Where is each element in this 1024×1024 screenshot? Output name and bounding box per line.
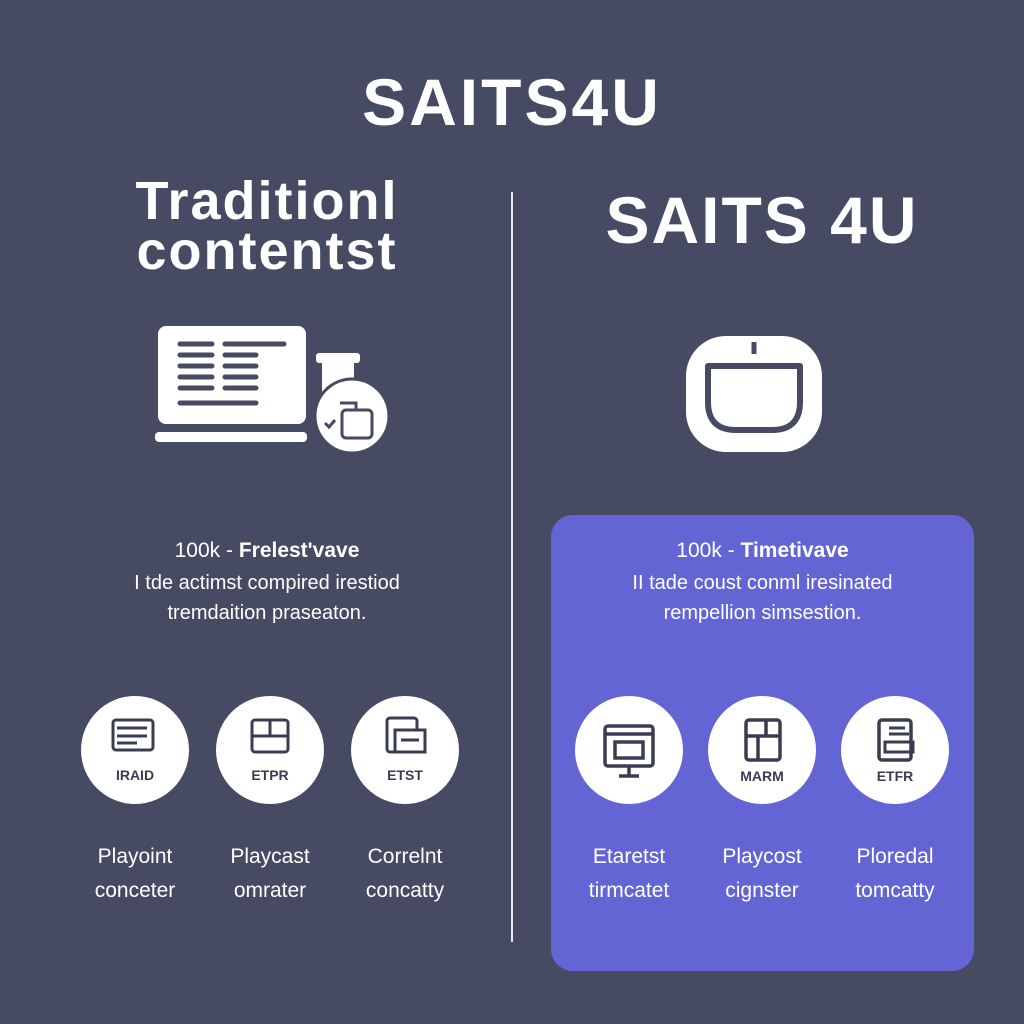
- labels: left: Correlnt: [368, 845, 442, 868]
- icon row: left: ETST: [387, 767, 423, 783]
- labels: right: tomcatty: [855, 879, 935, 902]
- text block: left: 100k - Frelest'vave: [175, 539, 359, 562]
- text block: right: rempellion simsestion.: [664, 602, 861, 624]
- text block: left: tremdaition praseaton.: [167, 602, 366, 624]
- labels: left: Playcast: [230, 845, 310, 868]
- labels: left: omrater: [234, 879, 306, 902]
- text block: right: 100k - Timetivave: [676, 539, 849, 562]
- icon row: left: ETPR: [251, 767, 289, 783]
- text block: left: I tde actimst compired irestiod: [134, 572, 400, 594]
- labels: right: [589, 845, 935, 902]
- labels: right: tirmcatet: [589, 879, 669, 902]
- heading: traditional: contentst: [136, 221, 398, 281]
- labels: right: cignster: [725, 879, 799, 902]
- icon row: right: ETFR: [877, 768, 913, 784]
- labels: left: concatty: [366, 879, 444, 902]
- icon row: left: IRAID: [116, 767, 154, 783]
- heading: traditional: [136, 171, 398, 281]
- heading: traditional: Traditionl: [136, 171, 398, 231]
- labels: right: Playcost: [722, 845, 802, 868]
- text block: right: [632, 539, 893, 624]
- icon row: right: MARM: [740, 768, 784, 784]
- icon row: right: [575, 696, 949, 804]
- text block: right: II tade coust conml iresinated: [632, 572, 893, 594]
- panel: saits4u: [551, 515, 974, 971]
- icon row: left: [81, 696, 459, 804]
- divider: [511, 192, 513, 942]
- heading: saits 4u: SAITS 4U: [605, 183, 919, 257]
- labels: right: Etaretst: [593, 845, 665, 868]
- labels: left: [95, 845, 444, 902]
- icon: device: [686, 336, 822, 452]
- labels: left: conceter: [95, 879, 175, 902]
- title: SAITS4U: [362, 65, 662, 139]
- labels: right: Ploredal: [856, 845, 934, 868]
- icon: laptop: [155, 326, 388, 452]
- labels: left: Playoint: [98, 845, 172, 868]
- text block: left: [134, 539, 400, 624]
